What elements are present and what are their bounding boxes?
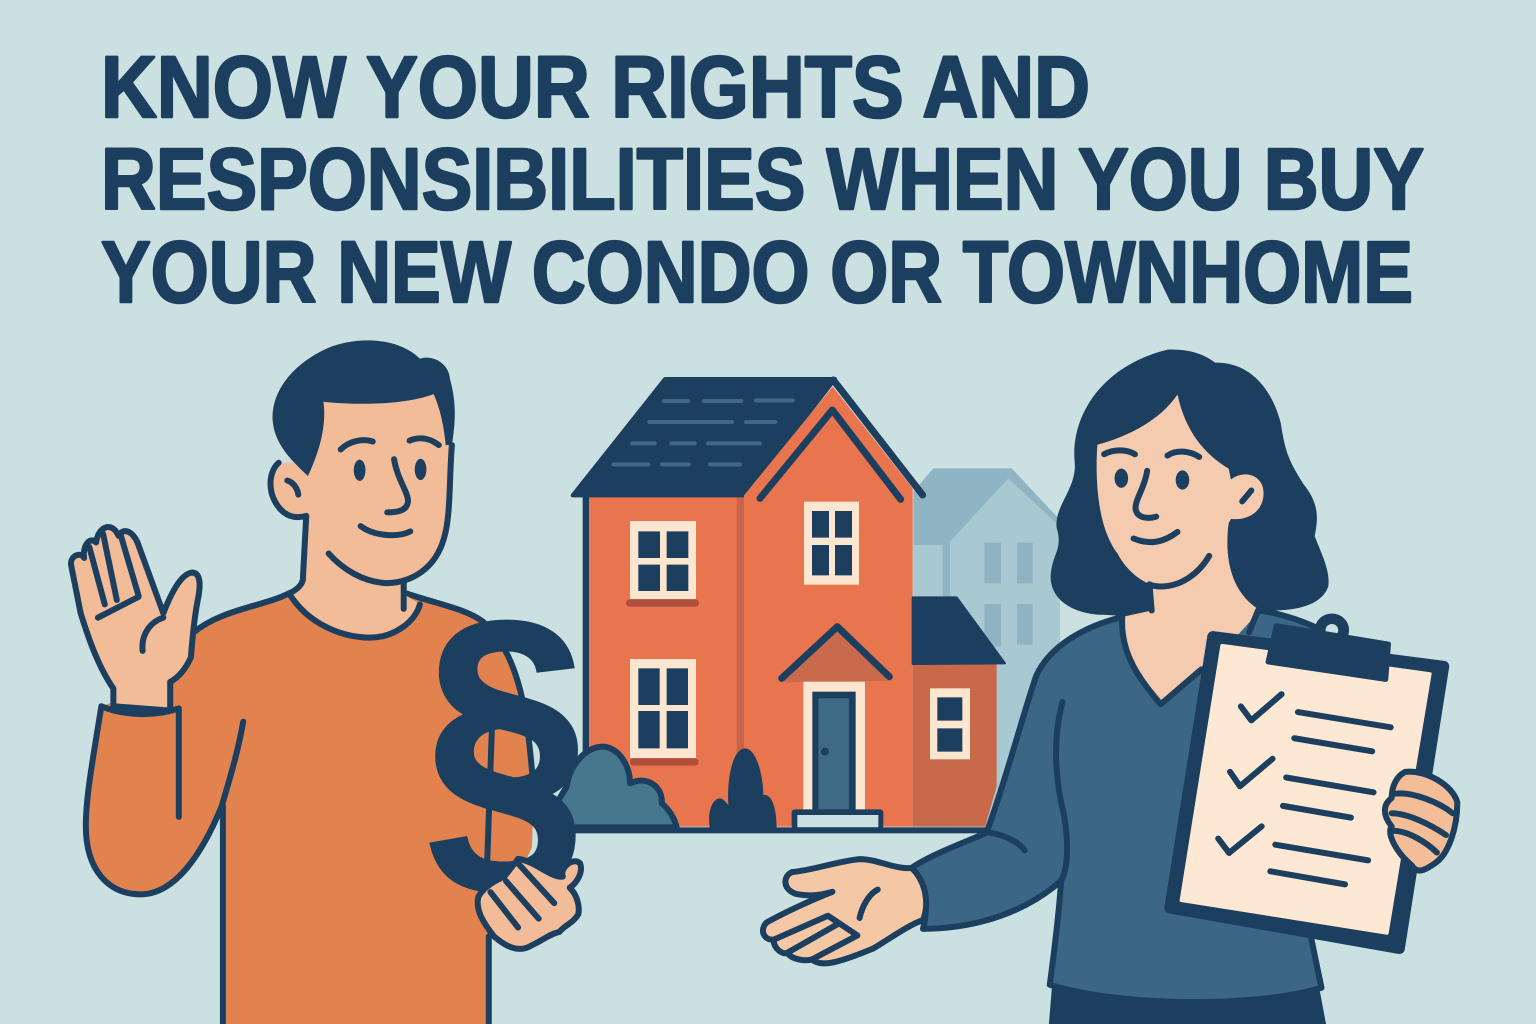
hand holding clipboard <box>1385 772 1457 871</box>
porch and door <box>780 627 892 829</box>
raised hand <box>71 527 200 711</box>
main house walls <box>583 494 744 827</box>
hand holding section symbol <box>478 859 581 949</box>
sweater <box>86 593 533 1024</box>
man figure <box>71 340 534 1024</box>
sweater <box>912 610 1321 1002</box>
pants <box>1049 986 1326 1024</box>
side annex <box>913 597 1005 827</box>
house scene <box>549 379 1060 833</box>
neck and head <box>271 392 452 638</box>
neck and face <box>1097 395 1264 704</box>
upper left window <box>626 521 699 607</box>
title <box>101 39 1424 321</box>
open hand <box>763 859 926 963</box>
upper right window <box>804 502 859 585</box>
man facial features <box>341 438 439 535</box>
ground line <box>560 827 990 833</box>
title: KNOW YOUR RIGHTS AND <box>101 39 1090 136</box>
hair <box>1051 350 1329 618</box>
sweater arm lines <box>991 702 1067 881</box>
checklist <box>1218 694 1391 884</box>
woman figure <box>763 350 1457 1024</box>
hair <box>272 340 455 476</box>
lower left window <box>630 659 699 766</box>
sweater outlines <box>86 593 534 1024</box>
bush left <box>549 747 677 827</box>
woman facial features <box>1104 450 1199 542</box>
section symbol: § <box>424 552 588 925</box>
background houses <box>913 468 1060 827</box>
clipboard <box>1170 613 1444 948</box>
roof <box>573 379 923 827</box>
bush small <box>709 748 777 829</box>
